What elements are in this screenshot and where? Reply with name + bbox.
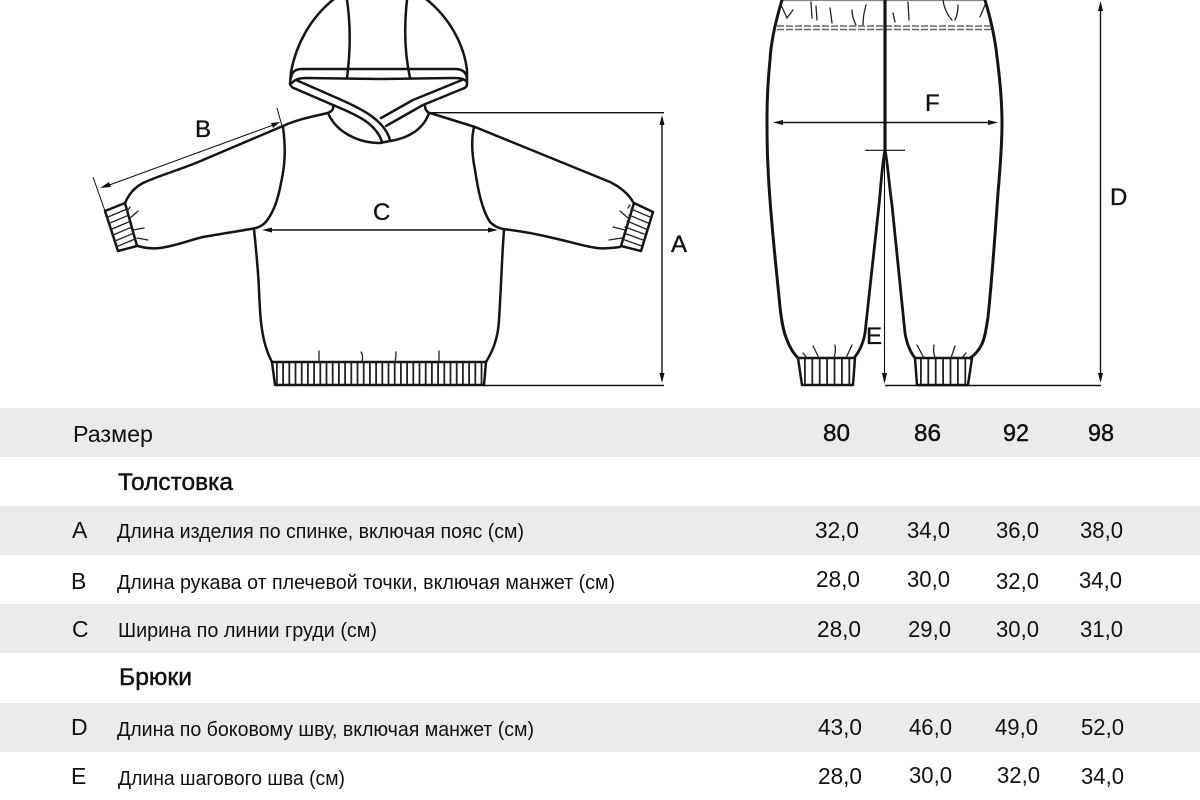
dimension: B: B <box>195 116 211 143</box>
right sleeve <box>430 113 653 251</box>
row B: 32,0 <box>996 568 1039 594</box>
dimension: E <box>865 150 905 384</box>
header row: 86 <box>914 420 941 447</box>
dimension: D: D <box>1110 184 1127 211</box>
row B: B <box>71 568 86 594</box>
row A: 34,0 <box>907 517 950 543</box>
section heading: hoodie: Толстовка <box>118 469 234 496</box>
row E: E <box>71 763 86 789</box>
dimension: D <box>885 1 1127 386</box>
dimension: C <box>262 199 498 232</box>
hoodie hem <box>272 351 486 385</box>
header row: 80 <box>823 420 850 447</box>
row C <box>0 604 1200 653</box>
row A: 38,0 <box>1080 517 1123 543</box>
row E: 34,0 <box>1081 763 1124 789</box>
trousers waistband <box>777 0 991 30</box>
row D: 46,0 <box>909 714 952 740</box>
hoodie body <box>254 229 504 362</box>
row D: D <box>71 714 88 740</box>
left sleeve <box>105 113 328 251</box>
row C: Ширина по линии груди (см) <box>118 620 377 642</box>
dimension: F <box>773 90 998 125</box>
row A: Длина изделия по спинке, включая пояс (см) <box>117 521 524 543</box>
row C: 30,0 <box>996 616 1039 642</box>
size table <box>0 408 1200 790</box>
header row: 92 <box>1003 420 1029 447</box>
row B <box>71 566 1122 594</box>
row B: Длина рукава от плечевой точки, включая манжет (см) <box>117 572 615 594</box>
trousers outline <box>767 0 1002 358</box>
row A: A <box>72 517 88 543</box>
row D <box>0 703 1200 752</box>
left trouser cuff <box>798 345 855 385</box>
row C: C <box>72 616 89 642</box>
trousers centre seam <box>883 0 887 150</box>
illustration: trousers <box>767 0 1002 385</box>
hoodie hood <box>290 0 467 143</box>
row A: 32,0 <box>815 517 859 543</box>
dimension: B <box>93 108 282 211</box>
row C: 28,0 <box>817 616 861 642</box>
header row: Размер <box>73 421 153 447</box>
row B: 34,0 <box>1079 567 1122 593</box>
header row: 98 <box>1088 420 1114 447</box>
row D: 52,0 <box>1081 714 1124 740</box>
row E: 32,0 <box>997 762 1040 788</box>
row B: 28,0 <box>816 566 860 592</box>
dimension: C: C <box>373 199 390 226</box>
dimension: F: F <box>925 90 940 117</box>
row D: 49,0 <box>995 714 1038 740</box>
section heading: trousers: Брюки <box>119 664 192 691</box>
row D: Длина по боковому шву, включая манжет (см) <box>117 719 534 741</box>
header row <box>0 408 1200 457</box>
row B: 30,0 <box>907 566 950 592</box>
row E: Длина шагового шва (см) <box>118 768 345 790</box>
row E: 30,0 <box>909 762 952 788</box>
row C: 29,0 <box>908 616 951 642</box>
row E <box>71 762 1124 790</box>
trousers inseam <box>854 150 915 358</box>
row C: 31,0 <box>1080 616 1123 642</box>
row D: 43,0 <box>818 714 862 740</box>
illustration: hoodie <box>105 0 653 385</box>
row A <box>0 506 1200 555</box>
right trouser cuff <box>915 345 972 385</box>
dimension: A <box>431 113 687 385</box>
dimension: A: A <box>671 231 687 258</box>
row A: 36,0 <box>996 517 1039 543</box>
dimension: E: E <box>866 323 882 350</box>
row E: 28,0 <box>818 763 862 789</box>
